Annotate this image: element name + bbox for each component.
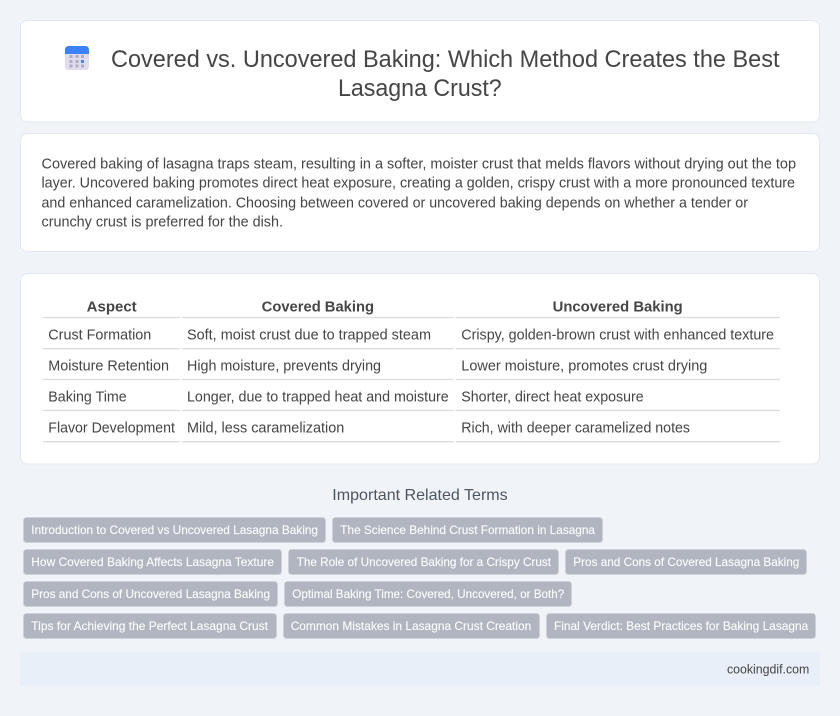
tag: Final Verdict: Best Practices for Baking Lasagna (554, 619, 809, 633)
tag: Common Mistakes in Lasagna Crust Creation (291, 619, 531, 633)
footer source text: cookingdif.com (727, 661, 809, 676)
table row: crust formation: Crust Formation (48, 327, 151, 343)
table header row: Aspect (87, 300, 137, 316)
description text: crunchy crust is preferred for the dish. (42, 214, 283, 230)
tag: The Role of Uncovered Baking for a Crispy Crust (297, 555, 552, 569)
panel: description (20, 134, 820, 252)
tag (332, 518, 602, 542)
table row: moisture retention: Lower moisture, promotes crust drying (461, 358, 707, 374)
tag: Introduction to Covered vs Uncovered Lasagna Baking (31, 523, 318, 537)
description text: and enhanced caramelization. Choosing between covered or uncovered baking depends on whether a tender or (42, 196, 748, 212)
table row: moisture retention: High moisture, prevents drying (187, 358, 381, 374)
table header row: Covered Baking (262, 300, 374, 316)
tag (24, 582, 278, 606)
title (111, 46, 780, 102)
tag: Pros and Cons of Uncovered Lasagna Baking (31, 587, 270, 601)
tag: Optimal Baking Time: Covered, Uncovered, or Both? (292, 587, 565, 601)
table row: baking time: Shorter, direct heat exposure (461, 389, 644, 405)
footer (20, 652, 820, 686)
tag: The Science Behind Crust Formation in Lasagna (340, 523, 595, 537)
table header row (43, 300, 780, 318)
tag: How Covered Baking Affects Lasagna Texture (31, 555, 274, 569)
table row: crust formation (43, 327, 780, 349)
panel: comparison table (20, 274, 820, 464)
table header row: Uncovered Baking (553, 300, 683, 316)
tag (284, 582, 572, 606)
heading: important related terms: Important Related Terms (332, 487, 508, 504)
table row: flavor development: Rich, with deeper caramelized notes (461, 420, 690, 436)
tag (24, 550, 282, 574)
tag (566, 550, 806, 574)
table row: baking time: Baking Time (48, 389, 127, 405)
panel: header (20, 20, 820, 122)
tag (24, 614, 276, 638)
icon: calendar (65, 46, 89, 70)
tag (24, 518, 326, 542)
table row: baking time (43, 389, 780, 410)
tag: Tips for Achieving the Perfect Lasagna Crust (31, 619, 269, 633)
description text: layer. Uncovered baking promotes direct heat exposure, creating a golden, crispy crust with a more pronounced texture (42, 176, 795, 192)
description text (42, 156, 796, 230)
table row: baking time: Longer, due to trapped heat and moisture (187, 389, 449, 405)
related term tags (24, 518, 816, 638)
tag (284, 614, 540, 638)
tag (546, 614, 816, 638)
table row: crust formation: Soft, moist crust due to trapped steam (187, 327, 431, 343)
table row: crust formation: Crispy, golden-brown crust with enhanced texture (461, 327, 774, 343)
title: Covered vs. Uncovered Baking: Which Method Creates the Best (111, 46, 780, 73)
table row: moisture retention (43, 358, 780, 380)
table row: flavor development (43, 420, 780, 442)
description text: Covered baking of lasagna traps steam, resulting in a softer, moister crust that melds flavors without drying out the top (42, 156, 796, 172)
title: Lasagna Crust? (338, 75, 502, 102)
table row: flavor development: Flavor Development (48, 420, 175, 436)
table row: flavor development: Mild, less caramelization (187, 420, 344, 436)
table row: moisture retention: Moisture Retention (48, 358, 169, 374)
tag (288, 550, 558, 574)
tag: Pros and Cons of Covered Lasagna Baking (573, 555, 799, 569)
